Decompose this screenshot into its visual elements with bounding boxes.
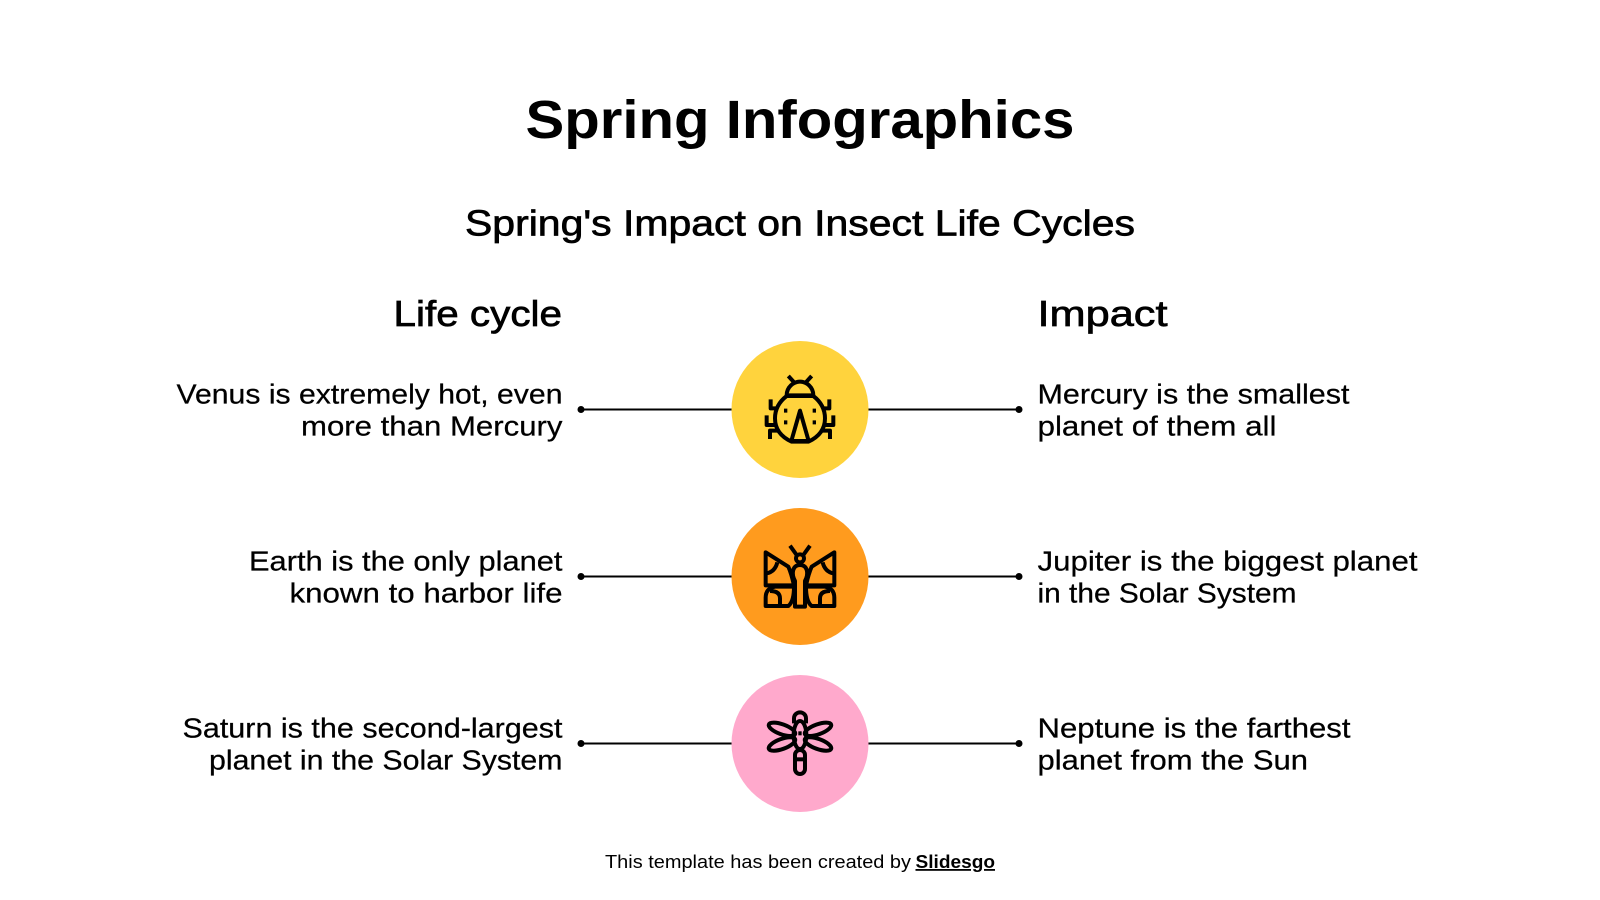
connector line left xyxy=(578,406,732,413)
row 3: dragonfly xyxy=(182,675,1022,812)
right text: Jupiter xyxy=(1038,546,1418,608)
right text: Jupiter: in the Solar System xyxy=(1038,578,1296,608)
footer credit: Slidesgo xyxy=(916,852,995,872)
row 2: butterfly xyxy=(249,508,1022,645)
left text: Venus xyxy=(176,378,562,442)
right text: Mercury: Mercury is the smallest xyxy=(1038,378,1350,410)
right text: Mercury xyxy=(1038,378,1350,442)
right text: Jupiter: Jupiter is the biggest planet xyxy=(1038,546,1418,576)
right text: Neptune: planet from the Sun xyxy=(1038,744,1308,776)
subtitle: Spring's Impact on Insect Life Cycles xyxy=(465,202,1135,244)
right text: Neptune: Neptune is the farthest xyxy=(1038,712,1351,744)
connector line right xyxy=(868,406,1022,413)
row 1: ladybug xyxy=(176,341,1022,478)
icon: ladybug xyxy=(767,376,833,442)
orange circle xyxy=(732,508,868,645)
right text: Neptune xyxy=(1038,712,1351,776)
yellow circle xyxy=(732,341,868,478)
connector line left xyxy=(578,573,732,580)
connector line left xyxy=(578,740,732,747)
left text: Saturn: Saturn is the second-largest xyxy=(182,712,563,744)
left text: Earth xyxy=(249,546,563,608)
footer credit: This template has been created by xyxy=(605,852,911,872)
title: Spring Infographics xyxy=(526,90,1074,150)
left text: Earth: Earth is the only planet xyxy=(249,546,563,576)
left text: Venus: Venus is extremely hot, even xyxy=(176,378,562,410)
icon: butterfly xyxy=(766,546,834,607)
left text: Saturn: planet in the Solar System xyxy=(209,744,562,776)
left text: Earth: known to harbor life xyxy=(290,578,562,608)
heading: life cycle: Life cycle xyxy=(394,293,562,334)
left text: Venus: more than Mercury xyxy=(301,410,562,442)
right text: Mercury: planet of them all xyxy=(1038,410,1276,442)
icon: dragonfly xyxy=(767,712,833,774)
connector line right xyxy=(868,573,1022,580)
connector line right xyxy=(868,740,1022,747)
pink circle xyxy=(732,675,868,812)
heading: impact: Impact xyxy=(1038,293,1168,334)
left text: Saturn xyxy=(182,712,563,776)
